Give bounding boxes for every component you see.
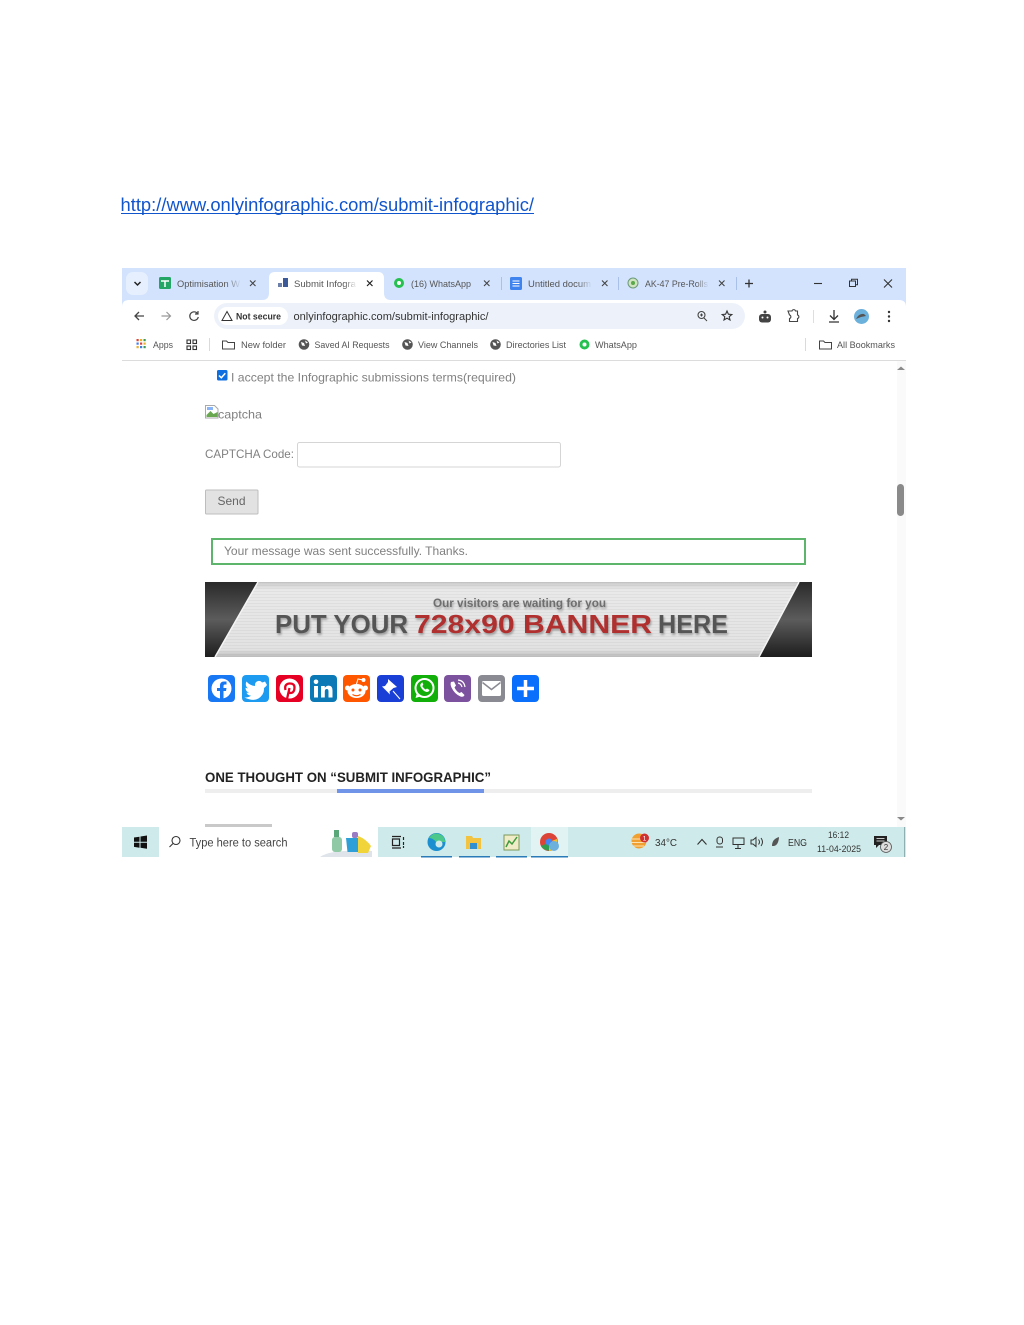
weather widget: 1 [643, 836, 647, 842]
success message: Your message was sent successfully. Thanks. [224, 544, 468, 558]
banner: 728x90 BANNER [414, 609, 652, 639]
clock: 16:12 [828, 830, 849, 841]
bookmark: Saved AI Requests: Saved AI Requests [314, 340, 390, 351]
bookmark: WhatsApp [580, 340, 637, 351]
icon: Reddit [343, 675, 370, 702]
clock [817, 830, 861, 855]
banner: PUT YOUR [275, 609, 408, 639]
icon: Facebook [208, 675, 235, 702]
address bar: onlyinfographic.com/submit-infographic/ [294, 311, 489, 323]
icon: Edge [421, 833, 452, 858]
tab: Optimisation [159, 276, 256, 290]
send button [206, 490, 258, 514]
bookmark: New folder: New folder [241, 340, 286, 351]
broken captcha image [206, 406, 262, 422]
banner: HERE [658, 609, 728, 639]
panel: web page form [205, 361, 906, 827]
comments heading: ONE THOUGHT ON “SUBMIT INFOGRAPHIC” [205, 769, 491, 785]
icon: extension robot [759, 310, 771, 322]
icon: Pinboard pin [377, 675, 404, 702]
icon: LinkedIn [310, 675, 337, 702]
weather widget: 34°C [655, 837, 677, 849]
icon: task view [392, 836, 404, 848]
terms text: I accept the Infographic submissions terms(required) [231, 370, 516, 384]
bookmark: WhatsApp: WhatsApp [595, 340, 637, 351]
tab: AK-47 Pre-Rolls [628, 276, 724, 290]
icon: Share plus [512, 675, 539, 702]
search box [159, 827, 378, 857]
tab: Submit Infographic (active): Submit Infogra [294, 279, 357, 290]
panel: tab strip [122, 268, 906, 307]
icon: Viber [444, 675, 471, 702]
send button: Send [218, 494, 246, 508]
notification icon: 2 [884, 843, 889, 852]
icon: profile avatar [854, 309, 869, 324]
address bar: Not secure [236, 312, 281, 322]
icon: new tab [745, 280, 753, 288]
icon: minimize [814, 282, 822, 284]
tab: AK-47 Pre-Rolls: AK-47 Pre-Rolls [645, 279, 708, 290]
tab: Submit Infographic (active) [262, 272, 391, 300]
icon: restore [850, 279, 858, 286]
address bar [214, 303, 745, 329]
icon: Chrome active [531, 827, 568, 858]
search box: Type here to search [190, 838, 288, 850]
panel: bookmarks bar: Apps [153, 340, 173, 351]
panel: taskbar [122, 827, 906, 858]
bookmark: Directories List: Directories List [506, 340, 566, 351]
icon: File Explorer [459, 836, 490, 858]
bookmark: View Channels: View Channels [418, 340, 478, 351]
tab: Untitled document [510, 276, 608, 290]
tab: Untitled document: Untitled docum [528, 279, 591, 290]
checkbox [217, 370, 228, 380]
icon: Pinterest [276, 675, 303, 702]
share icons [208, 675, 539, 702]
icon: apps grid [136, 339, 146, 348]
notification icon [874, 836, 892, 852]
icon: menu dots [888, 311, 890, 322]
icon: reload [190, 311, 198, 320]
icon: puzzle extensions [788, 310, 799, 322]
icon: download [829, 310, 839, 322]
tab: WhatsApp [394, 278, 490, 290]
title link: http://www.onlyinfographic.com/submit-infographic/ [120, 194, 535, 215]
icon: Windows start [134, 836, 147, 849]
system tray icons [698, 837, 807, 849]
banner: Our visitors are waiting for you [433, 598, 606, 610]
icon: forward arrow [162, 312, 170, 320]
system tray icons: ENG [788, 838, 807, 849]
success message [212, 539, 805, 564]
icon: chart app [496, 835, 527, 858]
icon: Twitter [242, 675, 269, 702]
weather widget [631, 834, 677, 849]
tab: WhatsApp: (16) WhatsApp [411, 279, 471, 290]
icon: tab groups [187, 340, 196, 350]
banner [205, 582, 812, 657]
clock: 11-04-2025 [817, 844, 861, 855]
icon: back arrow [135, 312, 144, 320]
panel: toolbar [122, 300, 906, 333]
icon: close window [884, 280, 892, 288]
tab: Optimisation: Optimisation W [177, 279, 240, 290]
icon: WhatsApp [411, 675, 438, 702]
captcha input [298, 442, 560, 467]
scrollbar [897, 361, 906, 827]
panel: browser screenshot [122, 268, 906, 858]
heading underline [205, 789, 812, 793]
captcha label: CAPTCHA Code: [205, 447, 294, 461]
broken captcha image: captcha [218, 408, 262, 422]
bookmark: All Bookmarks: All Bookmarks [837, 340, 895, 351]
icon: Email [478, 675, 505, 702]
panel: bookmarks bar [122, 338, 906, 361]
